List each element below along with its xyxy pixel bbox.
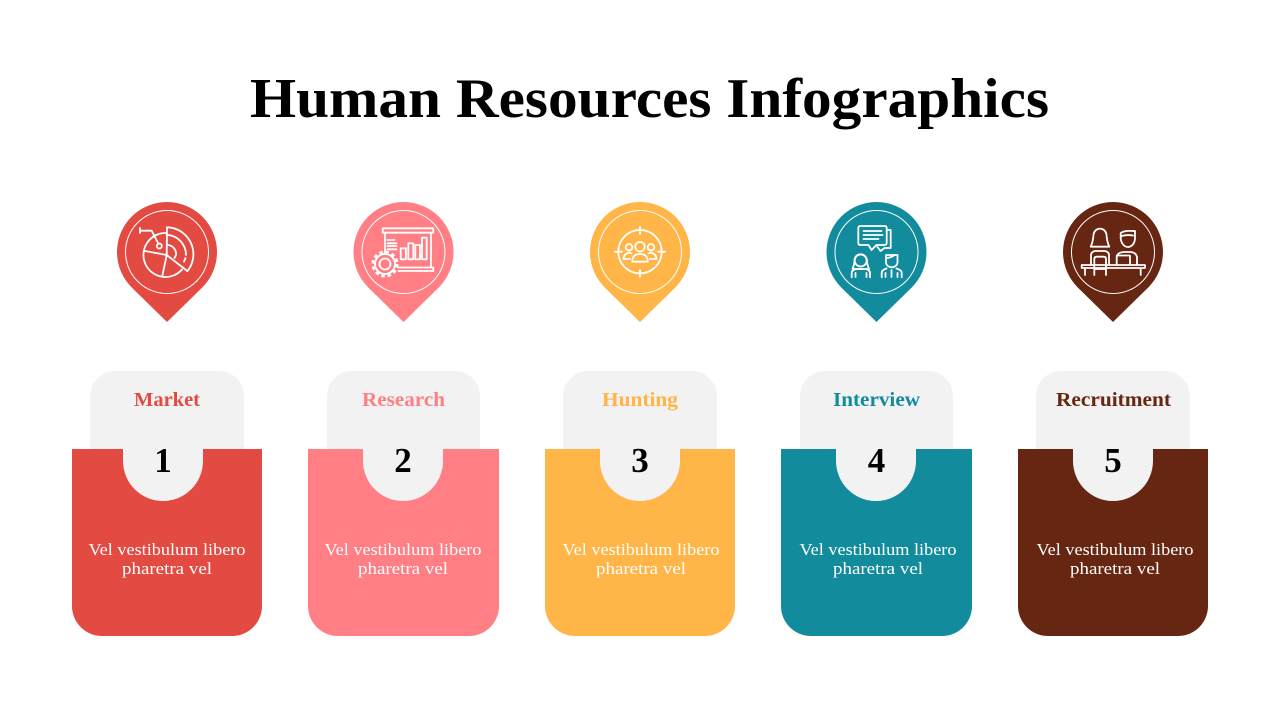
heading: Hunting — [602, 389, 678, 411]
title: Human Resources Infographics — [250, 68, 1049, 130]
grey header tab — [1036, 371, 1190, 460]
description: pharetra vel — [833, 559, 923, 578]
description: pharetra vel — [122, 559, 212, 578]
coloured card — [308, 449, 499, 636]
description: Vel vestibulum libero — [324, 540, 482, 559]
number: 1 — [154, 441, 172, 480]
panel: step 5 recruitment — [1018, 202, 1208, 636]
pin icon: interview conversation — [826, 202, 926, 322]
description: Vel vestibulum libero — [800, 540, 956, 559]
number: 2 — [394, 441, 412, 480]
number badge — [123, 449, 203, 501]
description: pharetra vel — [358, 559, 448, 578]
panel: step 3 hunting — [545, 202, 735, 636]
grey header tab — [563, 371, 717, 460]
grey header tab — [90, 371, 244, 460]
heading: Interview — [833, 389, 921, 411]
number: 5 — [1104, 441, 1122, 480]
description: Vel vestibulum libero — [562, 540, 720, 559]
panel: step 1 market — [72, 202, 262, 636]
heading: Research — [362, 389, 445, 411]
pin icon: recruitment desk — [1063, 202, 1163, 322]
pin icon: market analysis — [117, 202, 217, 322]
number badge — [1073, 449, 1153, 501]
coloured card — [1018, 449, 1208, 636]
heading: Market — [134, 389, 200, 411]
number: 3 — [631, 441, 649, 480]
grey header tab — [800, 371, 953, 460]
heading: Recruitment — [1056, 389, 1171, 411]
description: Vel vestibulum libero — [88, 540, 246, 559]
grey header tab — [327, 371, 480, 460]
description: pharetra vel — [1070, 559, 1160, 578]
number badge — [363, 449, 443, 501]
panel: step 2 research — [308, 202, 499, 636]
panel: step 4 interview — [781, 202, 972, 636]
coloured card — [545, 449, 735, 636]
number badge — [600, 449, 680, 501]
coloured card — [72, 449, 262, 636]
description: pharetra vel — [596, 559, 686, 578]
number: 4 — [868, 441, 885, 480]
pin icon: talent target — [590, 202, 690, 322]
pin icon: research presentation — [354, 202, 454, 322]
coloured card — [781, 449, 972, 636]
number badge — [836, 449, 916, 501]
description: Vel vestibulum libero — [1036, 540, 1194, 559]
